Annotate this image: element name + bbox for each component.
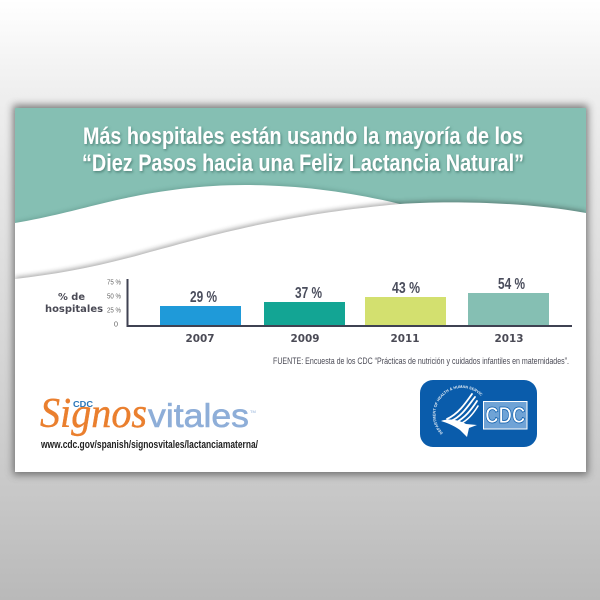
upper wave shadow <box>15 182 400 223</box>
year labels: 2007 <box>186 333 214 345</box>
logo: CDC Signos vitales: Signos <box>40 391 147 437</box>
y axis ticks <box>107 278 121 328</box>
logo: CDC Signos vitales <box>40 391 256 437</box>
logo: CDC Signos vitales: TM <box>250 409 256 414</box>
value labels: 29 % <box>190 289 217 306</box>
icon: HHS eagle seal: DEPARTMENT OF HEALTH & HUMAN SERVICES USA <box>432 385 482 435</box>
value labels: 37 % <box>295 285 322 302</box>
y axis label <box>45 292 103 315</box>
bar 2007 <box>160 306 241 325</box>
url: www.cdc.gov/spanish/signosvitales/lactanciamaterna/ <box>40 439 258 451</box>
bar 2009 <box>264 302 345 325</box>
icon: HHS eagle seal <box>432 385 482 437</box>
card shadow <box>13 105 588 475</box>
lower white wave <box>15 202 586 302</box>
y axis ticks: 75 % <box>107 278 121 286</box>
value labels: 43 % <box>392 280 420 297</box>
axes <box>128 279 572 326</box>
year labels <box>186 333 524 345</box>
y axis label: hospitales <box>45 304 103 315</box>
logo: CDC Signos vitales: vitales <box>148 397 249 434</box>
logo: HHS and CDC <box>420 380 537 447</box>
lower wave shadow <box>15 198 586 279</box>
y axis ticks: 25 % <box>107 306 121 314</box>
logo: CDC Signos vitales: CDC <box>73 400 93 409</box>
value labels <box>190 276 525 306</box>
bar 2013 <box>468 293 549 325</box>
y axis ticks: 50 % <box>107 292 121 300</box>
upper white wave <box>15 185 400 279</box>
year labels: 2009 <box>290 333 320 345</box>
bar chart <box>45 276 572 345</box>
y axis label: % de <box>58 292 85 303</box>
title <box>82 123 524 177</box>
year labels: 2011 <box>390 333 420 345</box>
year labels: 2013 <box>494 333 524 345</box>
icon: CDC box: CDC <box>485 402 525 428</box>
panel: card <box>15 108 586 472</box>
y axis ticks: 0 <box>114 320 118 328</box>
bar 2011 <box>365 297 446 325</box>
value labels: 54 % <box>498 276 525 293</box>
teal header <box>15 108 586 228</box>
